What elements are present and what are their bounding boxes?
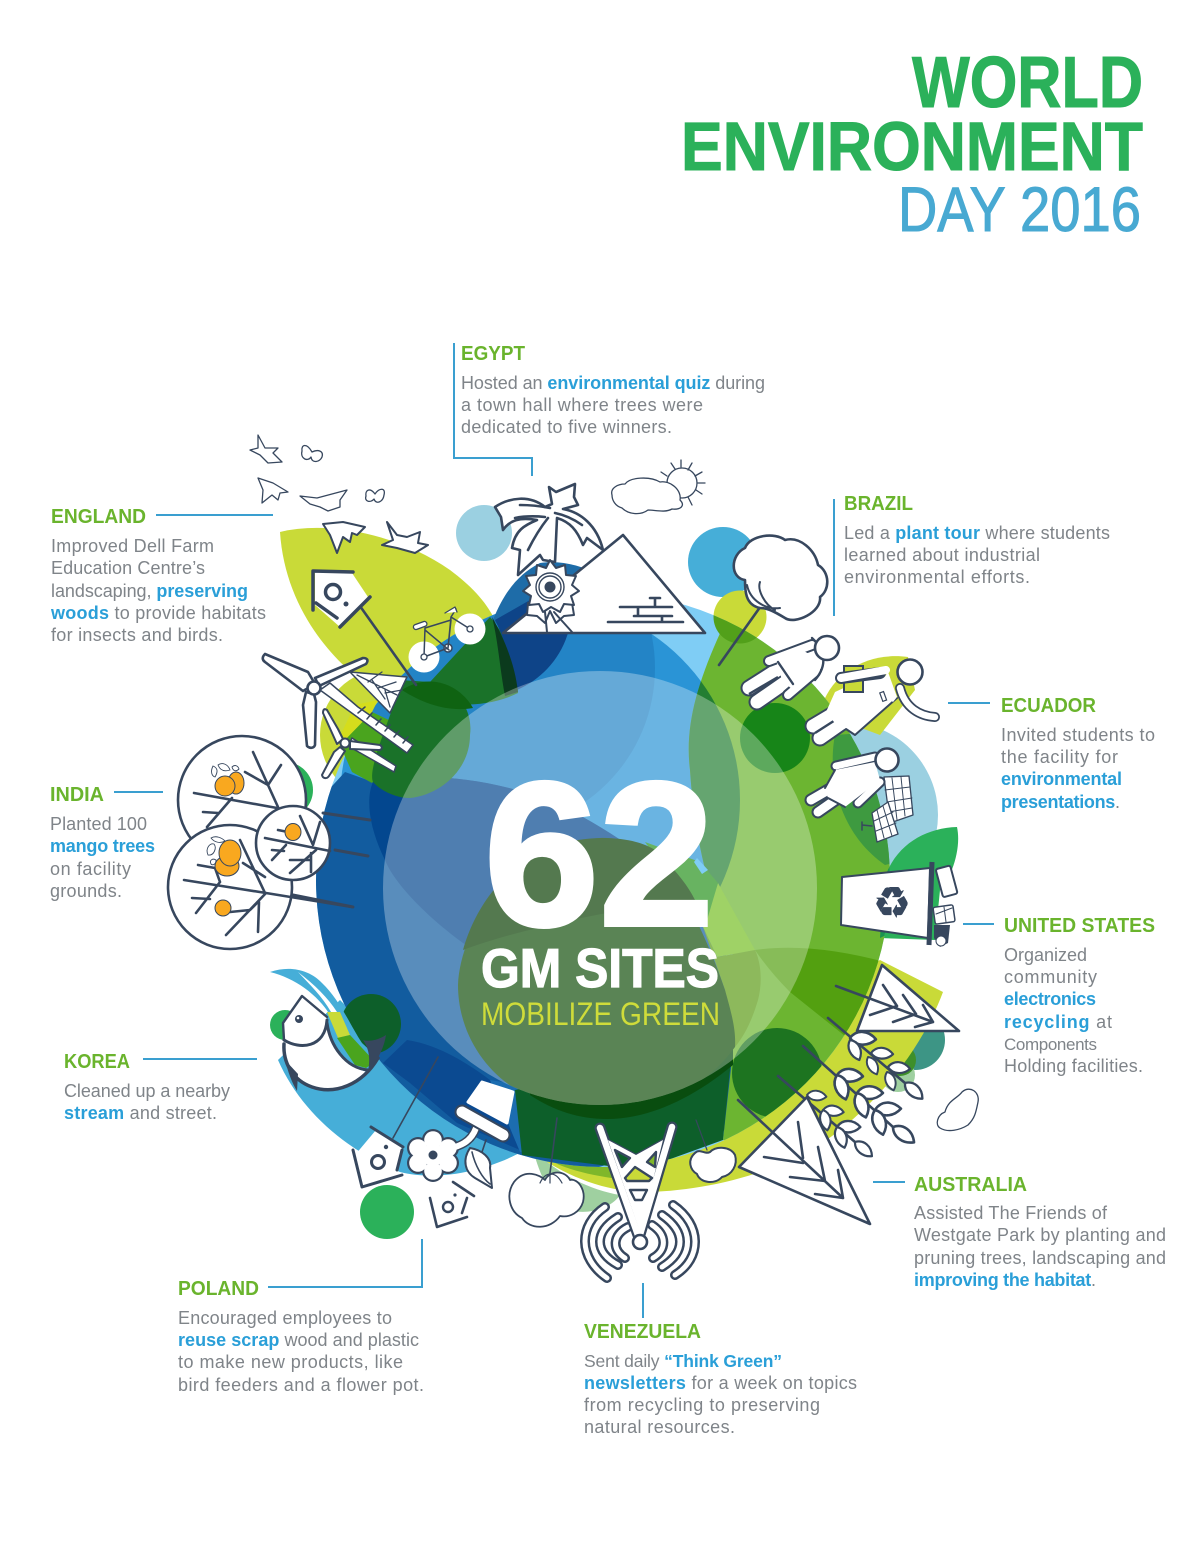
text block: Ecuador [1001,695,1155,812]
icon: fish with stream [270,969,386,1091]
text block: Australia: AUSTRALIA [914,1174,1027,1196]
connector lines [114,343,994,1318]
icon: mango trees [168,736,370,949]
text block: Venezuela: natural resources. [584,1417,735,1437]
text block: India: on facility [50,859,131,879]
center statistic: 62 GM sites: 62 [484,740,714,969]
title: WORLD [912,43,1143,123]
text block: Australia: pruning trees, landscaping and [914,1248,1166,1268]
text block: Poland: POLAND [178,1278,259,1300]
text block: Venezuela [584,1321,857,1437]
text block: Brazil: environmental efforts. [844,567,1030,587]
icon: pyramid [503,535,705,633]
text block: England: Improved Dell Farm [51,536,214,556]
text block: India: mango trees [50,836,155,856]
text block: Australia [914,1174,1166,1290]
text block: Australia: improving the habitat. [914,1270,1096,1290]
text block: Poland: to make new products, like [178,1352,403,1372]
text block: Korea: Cleaned up a nearby [64,1081,230,1101]
icon: award badge [523,560,579,632]
text block: England: woods to provide habitats [50,603,266,623]
icon: large wind turbine and ruler [263,654,413,753]
text block: England: for insects and birds. [51,625,223,645]
text block: Egypt: dedicated to five winners. [461,417,672,437]
icon: flower [407,1128,476,1182]
text block: United States: electronics [1004,989,1096,1009]
text block: Venezuela: from recycling to preserving [584,1395,820,1415]
text block: Brazil [844,493,1110,587]
text block: Ecuador: ECUADOR [1001,695,1097,717]
icon: cloud right [937,1089,978,1131]
text block: India: INDIA [50,784,104,806]
text block: England: ENGLAND [51,506,146,528]
text block: England: landscaping, preserving [51,581,248,601]
text block: Poland [178,1278,424,1395]
icon: small wind turbine [322,709,396,778]
text block: Venezuela: Sent daily “Think Green” [584,1351,782,1371]
text block: Brazil: BRAZIL [844,493,913,515]
text block: Ecuador: the facility for [1001,747,1118,767]
text block: England [50,506,266,645]
text block: Egypt: Hosted an environmental quiz during [461,373,765,393]
title: ENVIRONMENT [681,108,1143,185]
text block: Egypt [461,343,765,437]
icon: small tree bottom right [690,1120,736,1182]
text block: United States: Holding facilities. [1004,1056,1143,1076]
icon: tree, Brazil [719,536,827,665]
icon: person with clipboard and tool [813,660,935,738]
icon: radio tower with signal [585,1127,695,1278]
icon: birdhouse small, Poland [430,1182,474,1227]
text block: Korea: KOREA [64,1051,130,1073]
icon: small leaf [350,672,407,713]
icon: sun and cloud [612,460,705,514]
center statistic: 62 GM sites: GM SITES [481,937,719,999]
title [681,43,1143,245]
icon: recycling bin with electronics [841,862,958,947]
icon: cloud tree bottom [509,1118,584,1227]
text block: United States: Organized [1004,945,1087,965]
icon: bicycle [408,607,486,672]
text block: United States: recycling at [1004,1012,1112,1032]
text block: Brazil: learned about industrial [844,545,1040,565]
icon: leaf triangle upper [836,965,959,1031]
text block: Ecuador: environmental [1001,769,1122,789]
icon: leaf, Poland [465,1140,492,1188]
icon: birds and butterflies [250,435,428,553]
icon: leaf triangle lower [738,1097,870,1224]
icon: birdhouse on pole, Poland [353,1057,438,1187]
center statistic: 62 GM sites: MOBILIZE GREEN [481,996,720,1032]
icon: person with backpack 1 [749,636,839,702]
text block: Brazil: Led a plant tour where students [844,523,1110,543]
icon: birdhouse on pole [313,571,416,685]
icon: flower pot [462,1082,513,1135]
text block: India: grounds. [50,881,122,901]
icon: palm tree [495,484,603,575]
text block: Poland: bird feeders and a flower pot. [178,1375,424,1395]
title: DAY 2016 [898,175,1141,245]
text block: Australia: Assisted The Friends of [914,1203,1108,1223]
text block: Poland: reuse scrap wood and plastic [178,1330,419,1350]
text block: Ecuador: presentations. [1001,792,1120,812]
central globe background shapes [257,505,958,1239]
text block: Venezuela: newsletters for a week on topics [584,1373,857,1393]
icon: person with solar panels [811,748,913,842]
text block: Egypt: EGYPT [461,343,525,365]
text block: United States [1004,915,1155,1076]
text block: Egypt: a town hall where trees were [461,395,703,415]
text block: Korea [64,1051,230,1123]
text block: United States: community [1004,967,1097,987]
text block: England: Education Centre’s [51,558,205,578]
text block: Venezuela: VENEZUELA [584,1321,701,1343]
text block: Poland: Encouraged employees to [178,1308,392,1328]
text block: India: Planted 100 [50,814,147,834]
text block: Ecuador: Invited students to [1001,725,1155,745]
text block: Australia: Westgate Park by planting and [914,1225,1166,1245]
icon: recycling bin with electronics: ♻ [873,878,911,927]
text block: Korea: stream and street. [64,1103,217,1123]
text block: United States: Components [1004,1035,1097,1054]
text block: United States: UNITED STATES [1004,915,1155,937]
text block: India [50,784,155,901]
icon: leaf branches [778,1018,926,1160]
